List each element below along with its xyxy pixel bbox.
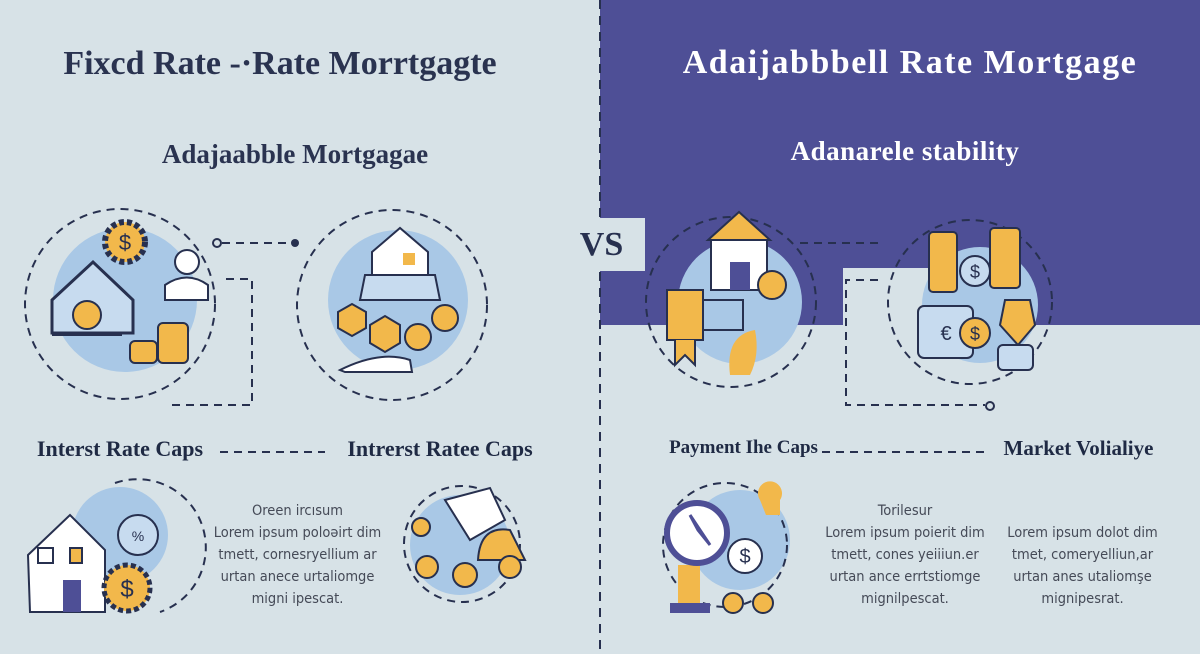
text block right 1: mignilpescat. xyxy=(861,591,949,607)
subtitle right: Adanarele stability xyxy=(791,136,1019,166)
label: Payment Ihe Caps: Payment Ihe Caps xyxy=(669,437,818,458)
text block right 2 xyxy=(1007,525,1158,607)
text block left: migni ipescat. xyxy=(252,591,343,607)
VS badge: VS xyxy=(580,226,623,263)
text block left: urtan anece urtaliomge xyxy=(221,569,374,585)
text block right 1: Lorem ipsum poierit dim xyxy=(825,525,985,541)
text block left: Lorem ipsum poloəirt dim xyxy=(214,525,381,541)
label: Intrerst Ratee Caps: Intrerst Ratee Caps xyxy=(347,436,533,461)
text block right 2: tmet, comeryelliun,ar xyxy=(1012,547,1153,563)
icon: house with gear xyxy=(28,479,206,612)
text block right 2: mignipesrat. xyxy=(1041,591,1124,607)
text block right 2: urtan anes utaliomşe xyxy=(1013,569,1152,585)
icon: magnifier xyxy=(663,481,790,613)
label: Market Volialiye: Market Volialiye xyxy=(1004,436,1153,460)
icon circle 1 xyxy=(25,209,215,399)
title left: Fixcd Rate -·Rate Morrtgagte xyxy=(63,45,497,82)
text block right 1 xyxy=(825,503,985,607)
icon circle 4: $ xyxy=(970,262,980,282)
label: Interst Rate Caps: Interst Rate Caps xyxy=(37,436,203,461)
text block right 1: urtan ance errtstiomge xyxy=(830,569,980,585)
text block right 1: Torilesur xyxy=(878,503,932,519)
icon circle 3 xyxy=(646,212,816,387)
VS badge xyxy=(558,218,645,271)
title right: Adaijabbbell Rate Mortgage xyxy=(683,44,1137,81)
icon: magnifier: $ xyxy=(739,546,751,568)
icon: house with gear: $ xyxy=(120,576,134,603)
text block left: Oreen ircısum xyxy=(252,503,343,519)
icon: money bags xyxy=(404,486,525,602)
text block right 2: Lorem ipsum dolot dim xyxy=(1007,525,1158,541)
icon circle 4 xyxy=(888,220,1052,384)
connectors right xyxy=(800,242,880,244)
icon: house with gear: % xyxy=(132,528,144,544)
text block left xyxy=(214,503,381,607)
icon circle 4: $ xyxy=(970,324,980,344)
connectors left xyxy=(222,242,292,244)
text block right 1: tmett, cones yeiiiun.er xyxy=(831,547,979,563)
icon circle 2 xyxy=(297,210,487,400)
subtitle left: Adajaabble Mortgagae xyxy=(162,139,428,169)
icon circle 1: $ xyxy=(119,230,131,255)
icon circle 4: € xyxy=(940,323,952,345)
text block left: tmett, cornesryellium ar xyxy=(218,547,377,563)
